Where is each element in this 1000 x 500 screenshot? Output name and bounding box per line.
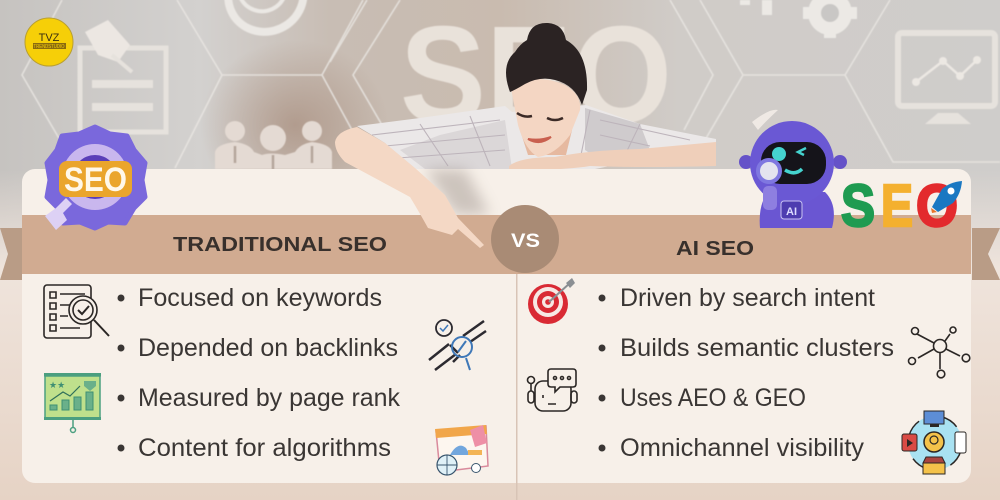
- icon: colourful SEO with rocket: [841, 173, 962, 239]
- ribbon ends: [0, 228, 1000, 280]
- icon: target with arrow: [528, 278, 575, 324]
- eyes and smile: [517, 113, 563, 120]
- background icon: team of people: [215, 121, 332, 169]
- list: Traditional SEO points: Focused on keywords: [138, 284, 382, 312]
- background hexagon network: [22, 0, 1000, 168]
- list: AI SEO points: Driven by search intent: [620, 284, 875, 312]
- background icon: pinned document: [80, 20, 166, 132]
- list: AI SEO points: Builds semantic clusters: [620, 334, 894, 362]
- icon: AI robot with magnifier: [739, 110, 847, 228]
- logo: TVZ: TRENDSTUDIO: [34, 44, 65, 50]
- vs badge: VS: [511, 231, 540, 252]
- icon: broken link with magnifier: [429, 320, 486, 370]
- background icon: monitor with chart: [898, 33, 995, 124]
- icon: omnichannel devices: [902, 411, 966, 474]
- list: Traditional SEO points: Depended on backlinks: [138, 334, 398, 362]
- shirt: [357, 105, 716, 170]
- face: [511, 79, 580, 157]
- woman: head and pointing arm: [335, 23, 587, 248]
- icon: SEO gear badge: SEO: [64, 161, 127, 199]
- background icon: target: [216, 0, 316, 44]
- woman: body above the card: [357, 105, 716, 170]
- icon: colourful SEO with rocket: S: [841, 173, 875, 239]
- pointing arm: [335, 127, 484, 248]
- centre divider: [516, 274, 518, 500]
- list: Traditional SEO points: Content for algorithms: [138, 434, 391, 462]
- header band: [22, 215, 971, 274]
- hand and right arm: [509, 142, 716, 170]
- icon: web content with globe: [435, 425, 488, 475]
- icon: colourful SEO with rocket: O: [916, 173, 958, 239]
- arm shadow: [425, 169, 490, 215]
- list: AI SEO points: Uses AEO & GEO: [620, 384, 806, 412]
- heading: AI SEO: AI SEO: [676, 238, 754, 260]
- background icon: gears: [740, 0, 857, 38]
- card: [22, 169, 971, 483]
- background title: SEO: SEO: [400, 0, 672, 152]
- icon: ranking chart board: [44, 373, 101, 432]
- neck: [520, 130, 572, 155]
- icon: colourful SEO with rocket: E: [881, 173, 913, 239]
- list: Traditional SEO points: [118, 284, 400, 462]
- icon: chatbot: [528, 369, 577, 411]
- icon: AI robot with magnifier: AI: [786, 206, 797, 218]
- icon: semantic network: [908, 327, 970, 378]
- vs badge: [491, 205, 559, 273]
- logo: TVZ: [25, 18, 73, 66]
- logo: TVZ: TVZ: [39, 32, 60, 44]
- heading: Traditional SEO: TRADITIONAL SEO: [173, 234, 387, 256]
- list: Traditional SEO points: Measured by page rank: [138, 384, 400, 412]
- list: AI SEO points: [598, 284, 894, 462]
- list: AI SEO points: Omnichannel visibility: [620, 434, 865, 462]
- hair: [506, 23, 587, 105]
- icon: checklist with magnifier: [44, 285, 109, 338]
- icon: ranking chart board: ★★: [49, 380, 65, 390]
- icon: SEO gear badge: [45, 127, 145, 230]
